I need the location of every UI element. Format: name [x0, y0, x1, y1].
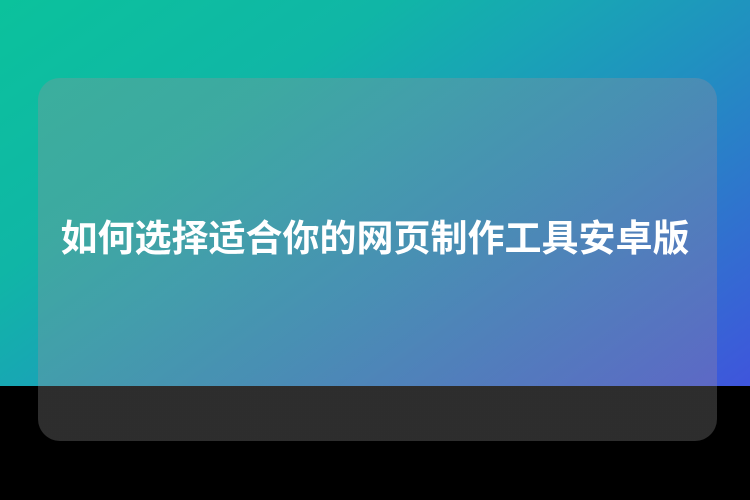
title: 如何选择适合你的网页制作工具安卓版 [60, 218, 690, 259]
gradient background [0, 0, 750, 386]
translucent panel [38, 78, 717, 441]
